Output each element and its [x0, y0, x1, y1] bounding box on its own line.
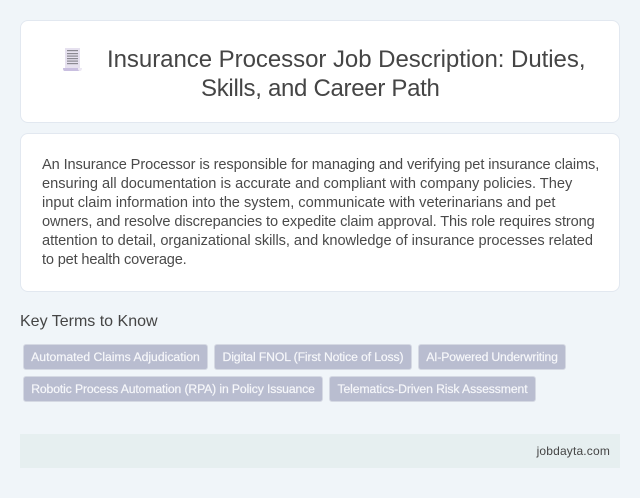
- tag: [214, 344, 412, 370]
- title: Insurance Processor Job Description: Duties,: [107, 46, 585, 73]
- footer source: jobdayta.com: [537, 444, 610, 458]
- tags: key terms: [23, 344, 566, 402]
- tag: Robotic Process Automation (RPA) in Policy Issuance: [31, 382, 315, 396]
- panel: description text: input claim information into the system, communicate with veterinarians and pet: [42, 195, 555, 211]
- tag: Automated Claims Adjudication: [31, 350, 200, 364]
- tag: AI-Powered Underwriting: [426, 350, 558, 364]
- heading: key terms: Key Terms to Know: [20, 313, 158, 330]
- title: [107, 46, 585, 102]
- panel: description text: ensuring all documentation is accurate and compliant with company policies. They: [42, 176, 572, 192]
- tag: [23, 376, 323, 402]
- tag: Telematics-Driven Risk Assessment: [337, 382, 528, 396]
- title: Skills, and Career Path: [201, 75, 440, 102]
- tag: Digital FNOL (First Notice of Loss): [223, 350, 403, 364]
- tag: [418, 344, 566, 370]
- panel: description text: attention to detail, organizational skills, and knowledge of insurance processes related: [42, 233, 593, 249]
- tag: [23, 344, 208, 370]
- footer bar: [20, 434, 620, 468]
- panel: description text: to pet health coverage.: [42, 252, 187, 268]
- icon: document receipt: [63, 48, 82, 71]
- panel: description text: An Insurance Processor is responsible for managing and verifying pet insurance claims,: [42, 157, 599, 173]
- tag: [329, 376, 536, 402]
- panel: description text: owners, and resolve discrepancies to expedite claim approval. This role requires strong: [42, 214, 595, 230]
- panel: description text: [20, 133, 620, 292]
- panel: title card: [20, 20, 620, 123]
